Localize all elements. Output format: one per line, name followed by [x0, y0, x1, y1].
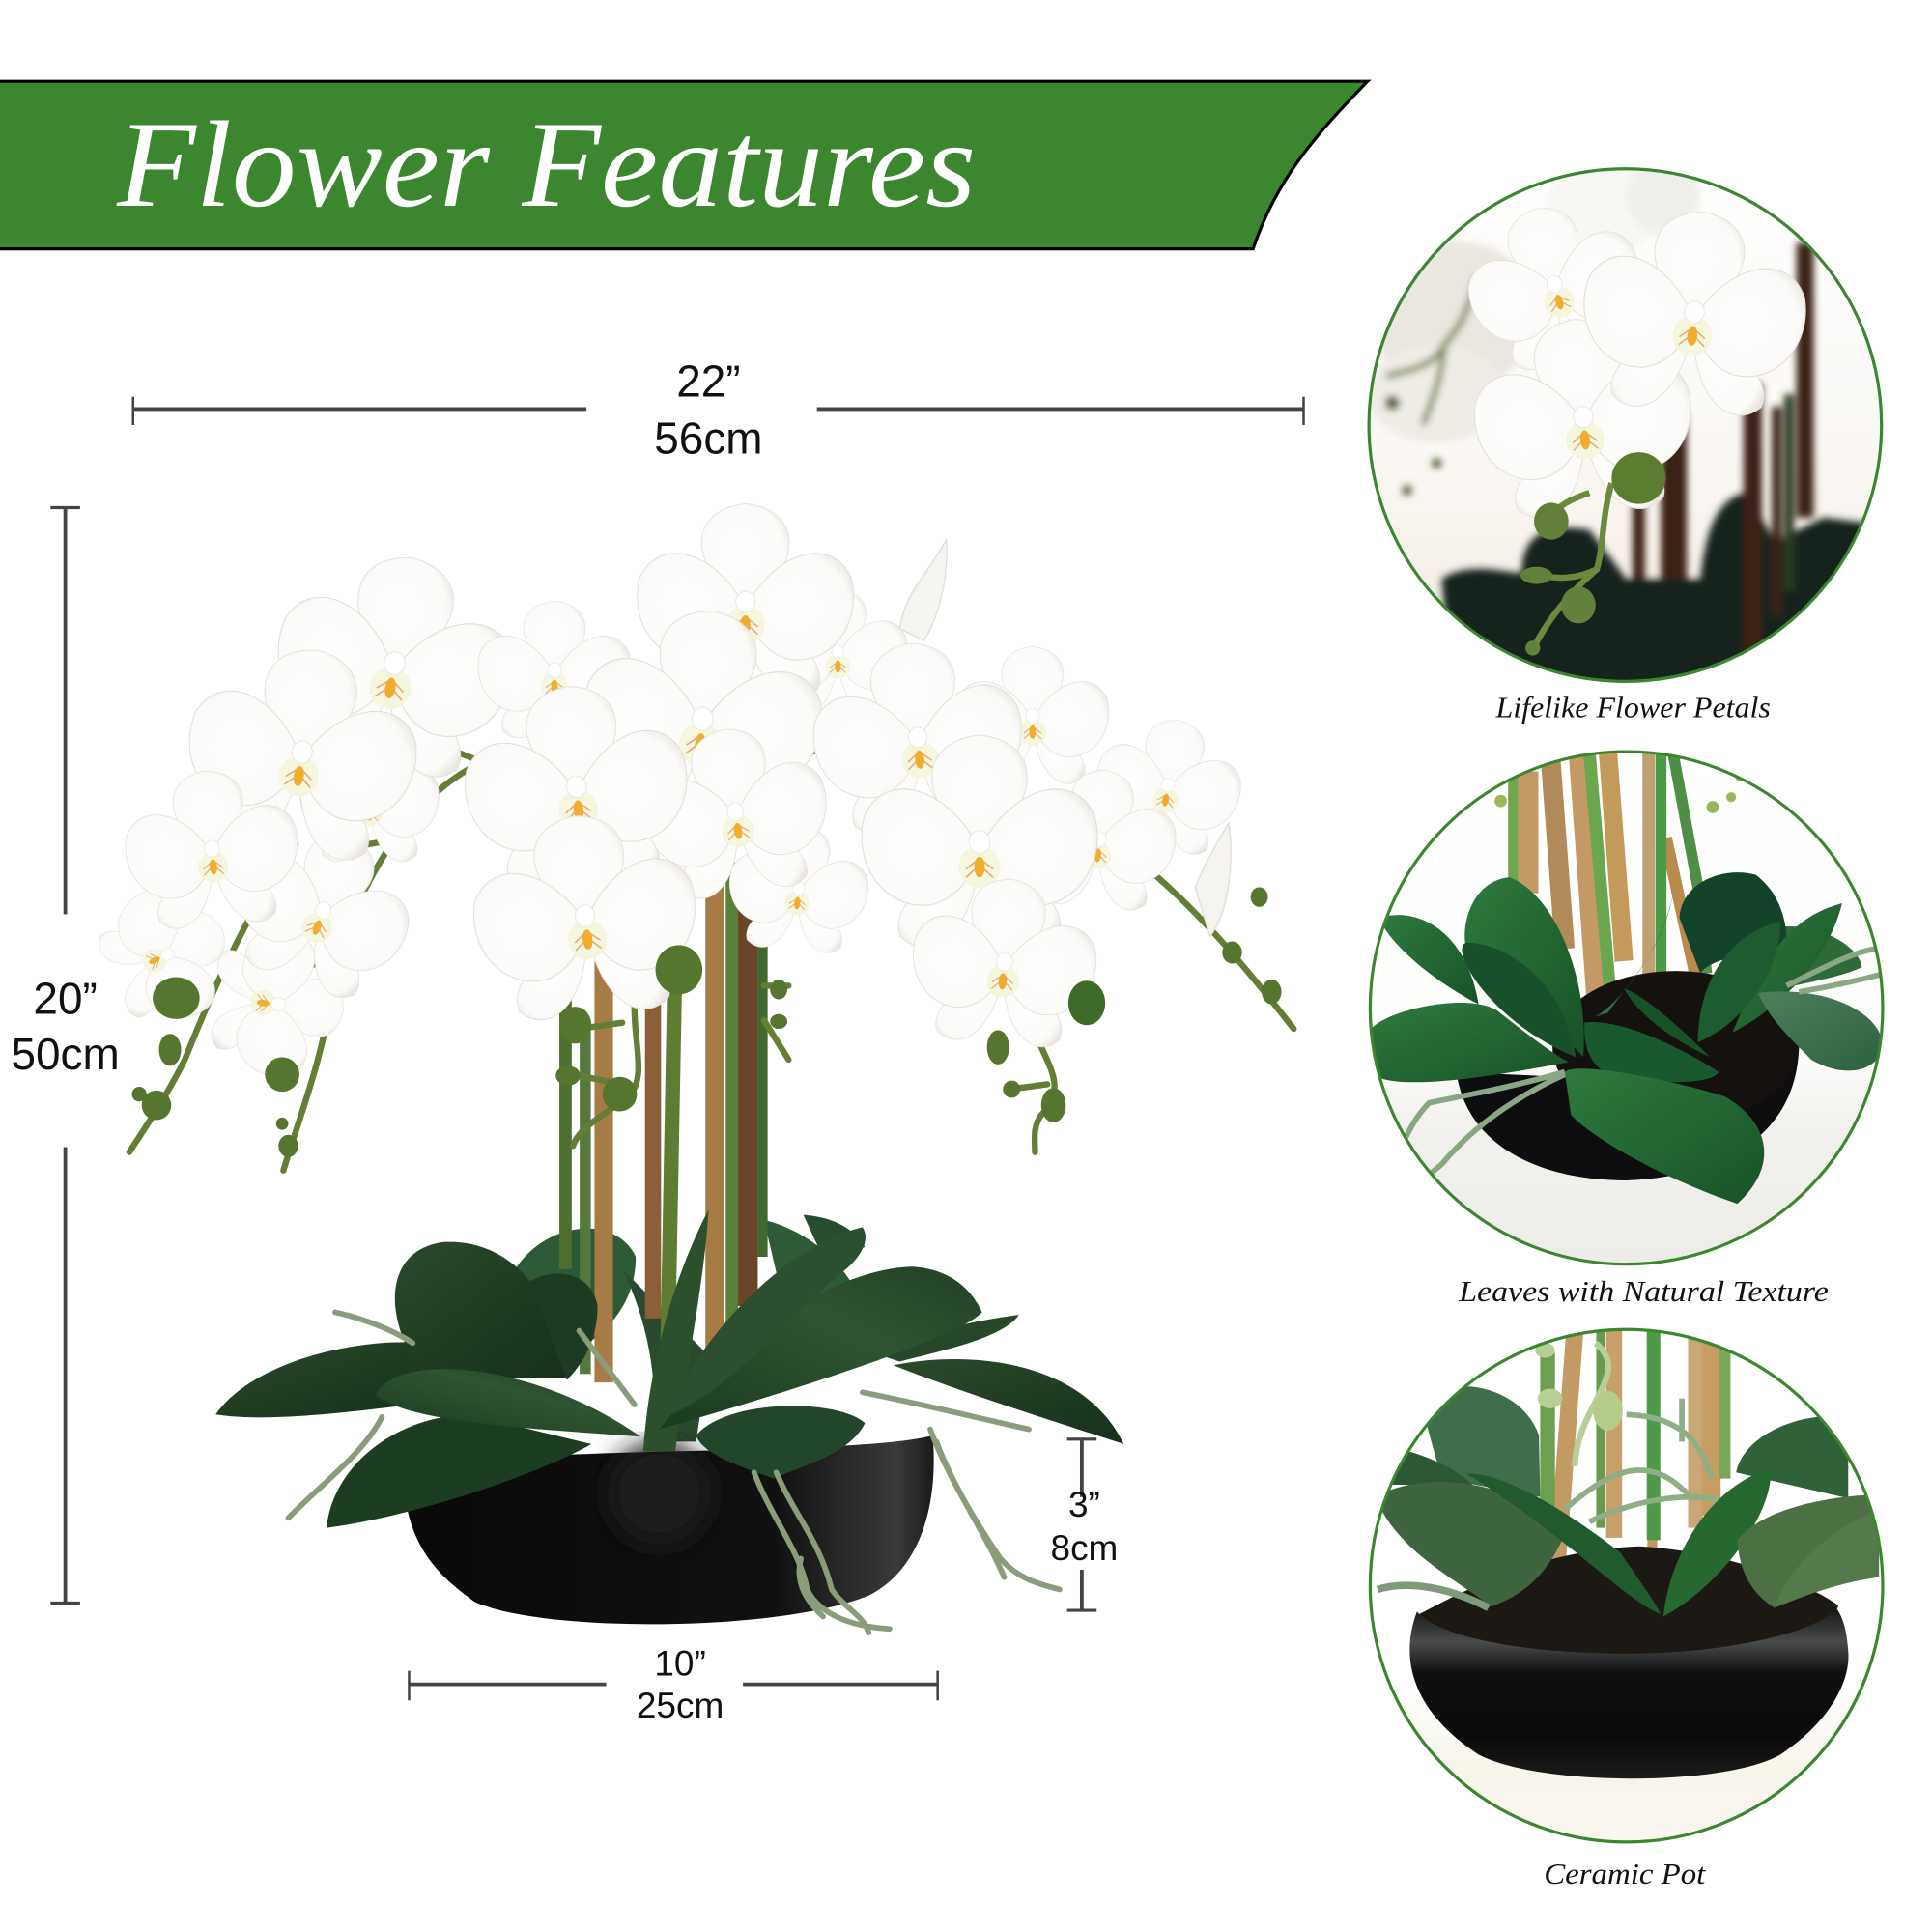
pot highlight: [608, 1441, 711, 1545]
back leaves: [511, 1215, 865, 1441]
orchid flowers: right cluster: [806, 540, 1251, 1051]
buds and stem: [1520, 452, 1665, 656]
back leaves: [1386, 1386, 1848, 1498]
roots: [1405, 949, 1886, 1177]
orchid flowers: left cluster: [86, 538, 529, 1082]
arching flower spikes: [129, 678, 1293, 1171]
title banner: [0, 81, 1368, 249]
canes and stems: [1548, 1329, 1725, 1593]
detail circle: leaves: [1355, 739, 1897, 1269]
dimension: overall width 22 inches: 22”: [676, 356, 741, 407]
caption: ceramic pot: Ceramic Pot: [1544, 1858, 1707, 1890]
foliage: [1375, 1468, 1879, 1616]
dimension: pot width 10 inches: [409, 1644, 938, 1725]
dimension: overall width 22 inches: 56cm: [654, 412, 763, 463]
dimension: pot height 3 inches: [1051, 1439, 1118, 1610]
blurred leaves and stems: [1441, 242, 1886, 702]
canes and stems: [1513, 752, 1707, 1023]
dimension: overall height 20 inches: 50cm: [11, 1029, 120, 1079]
dimension: overall height 20 inches: 20”: [33, 974, 98, 1024]
pot: [407, 1435, 934, 1624]
roots and pale buds: [1535, 1343, 1725, 1521]
tiny buds: [1494, 777, 1742, 813]
detail circle: ceramic pot: [1355, 1319, 1897, 1848]
orchid flowers: centre cluster: [457, 504, 907, 1026]
foliage: [1371, 872, 1884, 1204]
dimension: pot height 3 inches: 8cm: [1051, 1528, 1118, 1568]
dimension: pot width 10 inches: 10”: [654, 1644, 706, 1684]
main orchid plant photo: [86, 504, 1293, 1633]
aerial roots: [288, 1312, 1060, 1633]
blurred background flowers: [1368, 160, 1700, 496]
orchid blooms close-up: [1468, 208, 1636, 370]
soil: [1552, 971, 1799, 1084]
dimension: pot height 3 inches: 3”: [1068, 1485, 1100, 1524]
soil mound: [1419, 1547, 1838, 1655]
caption: flower petals: Lifelike Flower Petals: [1494, 691, 1771, 724]
front leaves: [215, 1210, 1123, 1528]
dimension: overall width 22 inches: [133, 356, 1303, 463]
detail circle: flower petals: [1355, 160, 1897, 702]
pot bowl: [1409, 1608, 1849, 1778]
stems and bamboo canes: [565, 863, 763, 1382]
green buds: [131, 887, 1282, 1157]
dimension: pot width 10 inches: 25cm: [637, 1686, 724, 1725]
title: Flower Features: [116, 96, 976, 233]
caption: leaves: Leaves with Natural Texture: [1458, 1275, 1829, 1308]
pot bowl: [1457, 1047, 1799, 1180]
dimension: overall height 20 inches: [11, 508, 120, 1603]
